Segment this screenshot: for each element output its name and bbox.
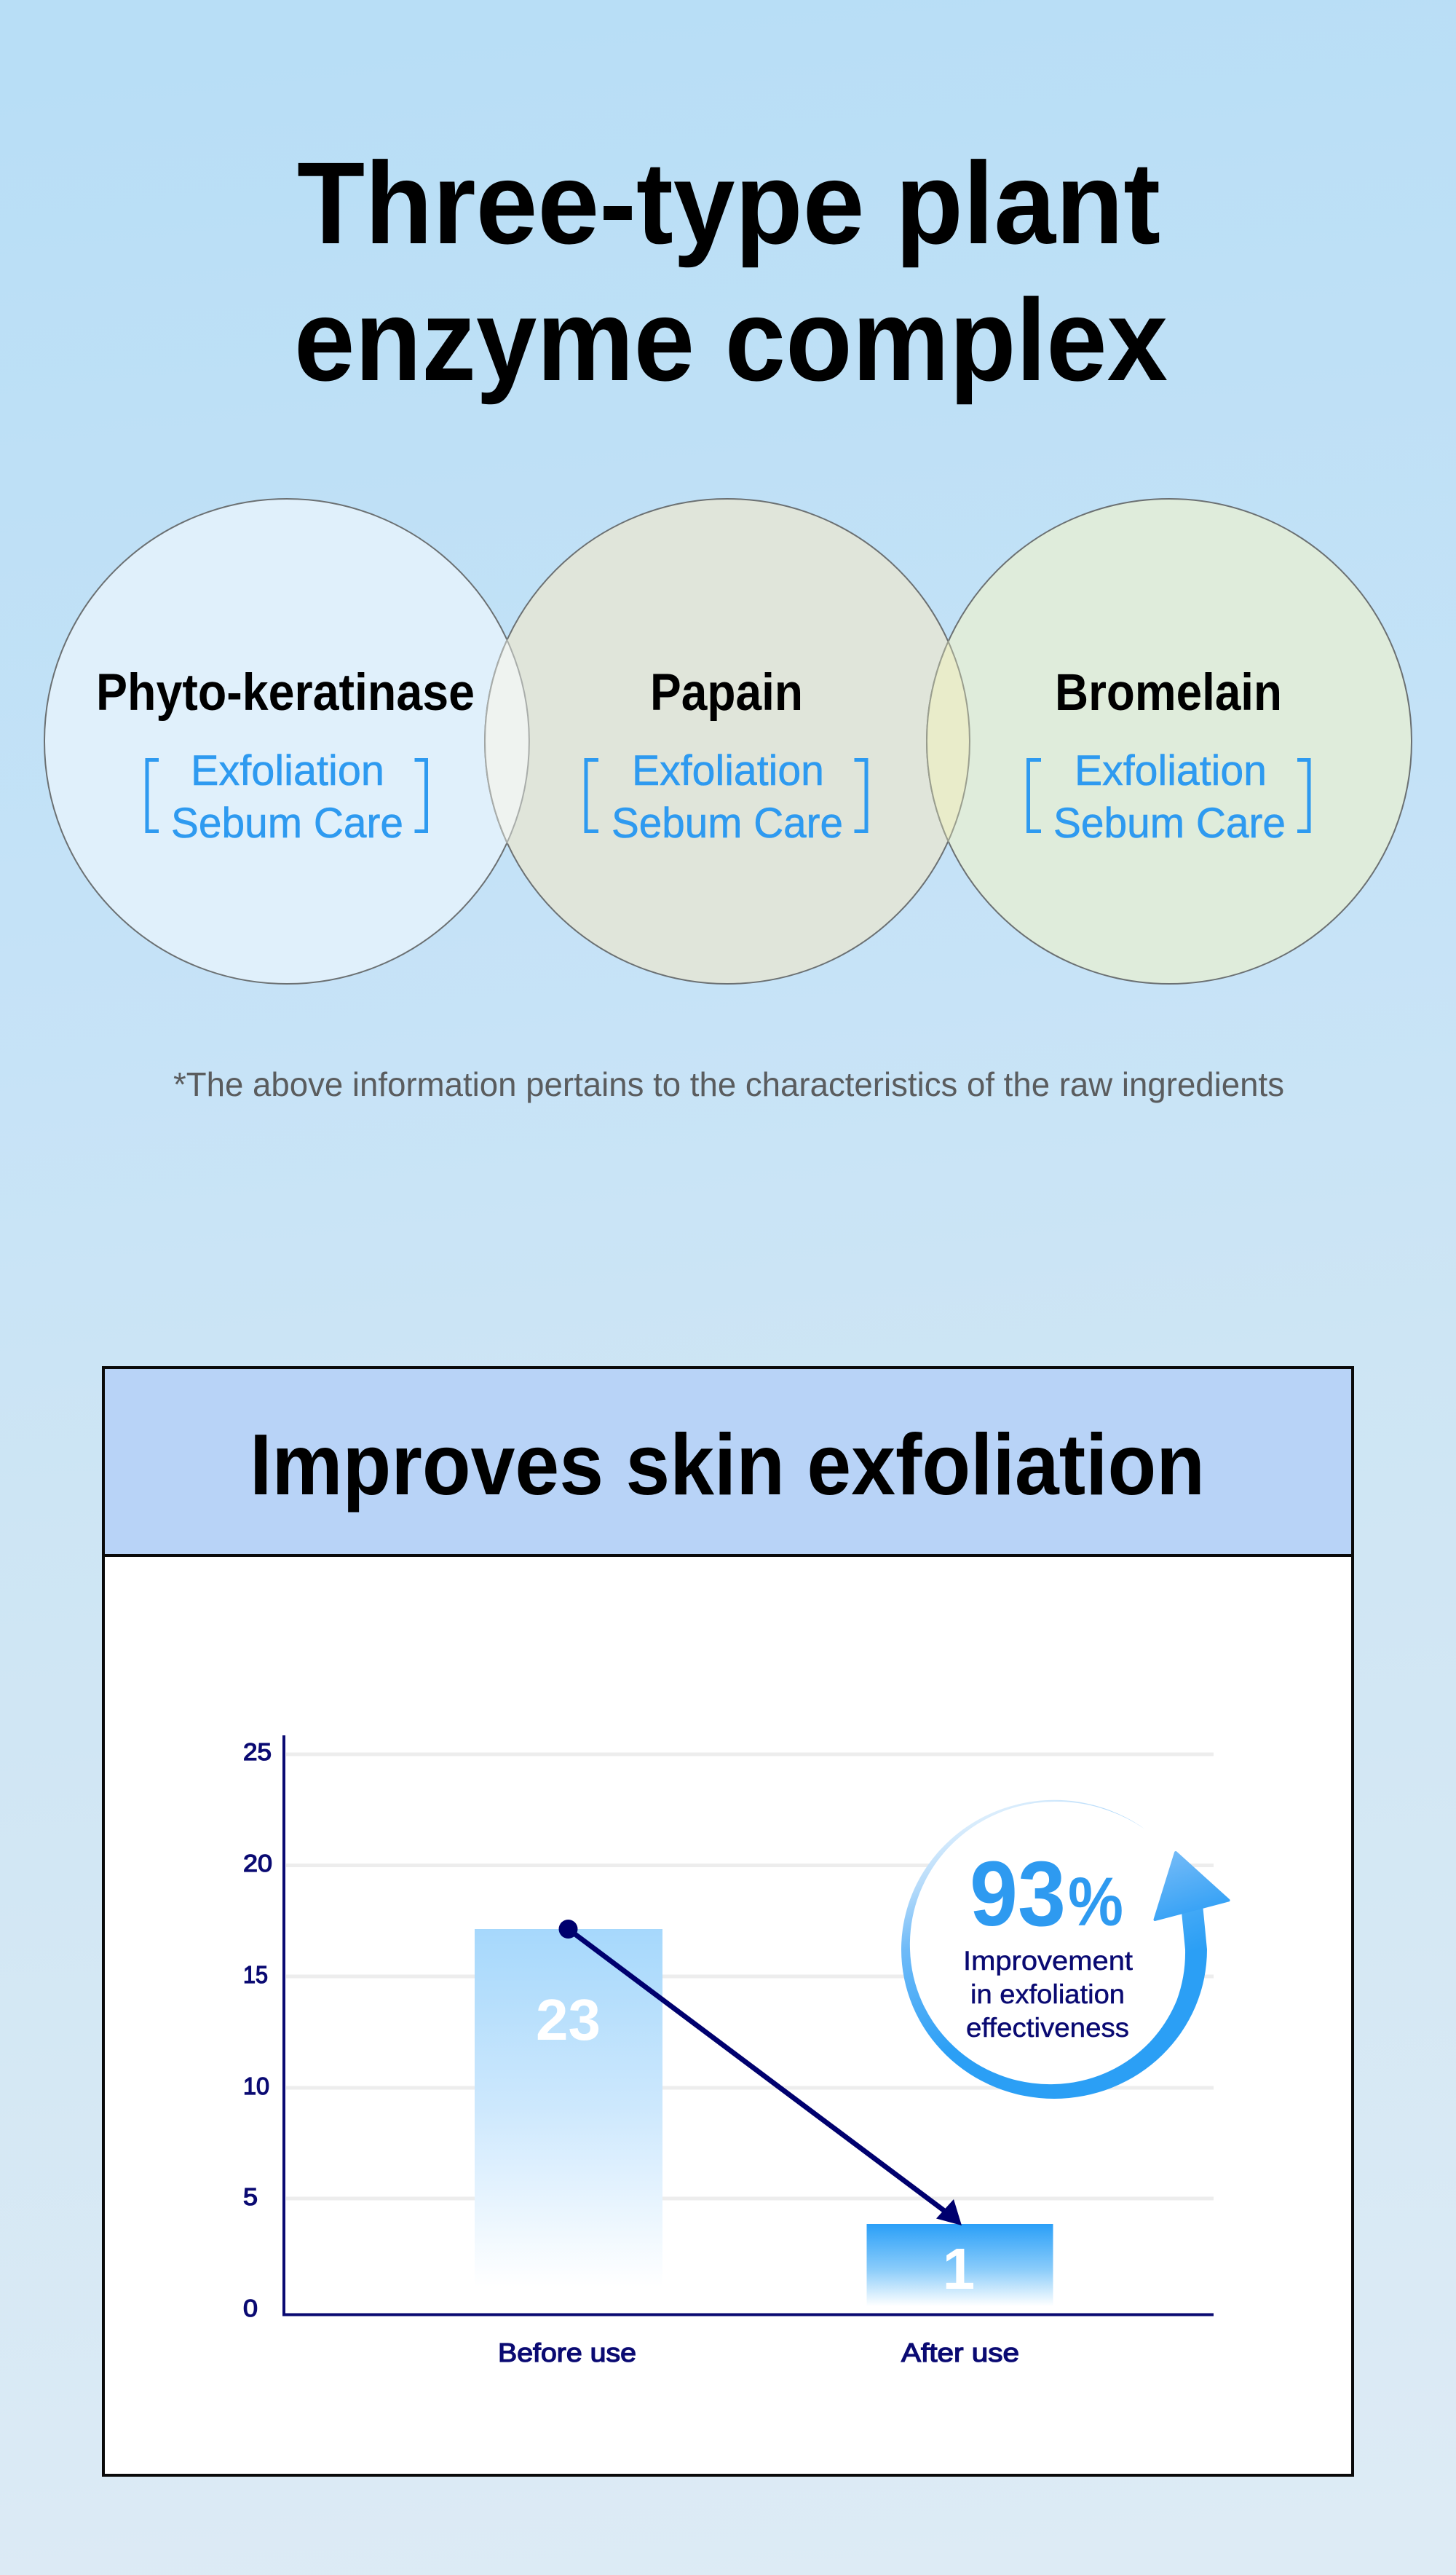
text: bromelain: Bromelain [1055,664,1282,722]
text: phyto-keratinase [96,664,475,847]
stat description [963,1946,1133,2043]
y axis labels: 5 [243,2183,258,2210]
icon: circular arrow [901,1800,1229,2099]
title: Three-type plant [297,138,1160,268]
bar chart [243,1735,1214,2367]
callout: 93% improvement [901,1800,1229,2099]
text: papain: Papain [650,664,803,722]
heading: Improves skin exfoliation [250,1416,1205,1513]
overlap: second and third circles [927,642,970,841]
axes [284,1735,1214,2314]
panel: three enzyme circles [44,499,1412,984]
title [294,138,1168,405]
bar: after use: 1 [943,2236,975,2301]
text: phyto-keratinase: Phyto-keratinase [96,664,475,722]
panel: improves skin exfoliation [103,1368,1353,2475]
y axis labels: 25 [243,1738,272,1765]
bar: before use [475,1929,662,2287]
arrow: decrease from before to after [559,1920,962,2225]
overlap: first and second circles [485,640,529,843]
y axis labels: 10 [243,2073,269,2099]
text: bromelain [1028,664,1309,847]
stat: 93% [970,1842,1123,1945]
x axis labels: Before use [498,2338,636,2367]
panel header [103,1368,1353,1555]
footnote: *The above information pertains to the characteristics of the raw ingredients [173,1065,1284,1103]
circle: papain [485,499,970,984]
y axis labels: 0 [243,2295,258,2322]
stat: 93%: % [1068,1864,1123,1941]
x axis labels: After use [901,2338,1019,2367]
text: bromelain: Exfoliation [1075,747,1267,794]
text: papain [586,664,866,847]
x axis labels [498,2338,1019,2367]
circle: bromelain [927,499,1412,984]
text: papain: Sebum Care [612,800,843,847]
title: enzyme complex [294,275,1168,405]
text: phyto-keratinase: Exfoliation [191,747,384,794]
bar: after use [866,2224,1053,2306]
text: phyto-keratinase: Sebum Care [171,800,403,847]
panel body [103,1368,1353,2475]
stat: 93%: 93 [970,1842,1066,1945]
stat description: in exfoliation [970,1979,1125,2009]
y axis labels: 15 [243,1961,268,1988]
stat description: effectiveness [966,2013,1129,2043]
text: bromelain: Sebum Care [1053,800,1286,847]
y axis labels [243,1738,272,2322]
stat description: Improvement [963,1946,1133,1976]
y axis labels: 20 [243,1850,272,1877]
circle: phyto-keratinase [44,499,529,984]
bar: before use: 23 [536,1987,601,2052]
text: papain: Exfoliation [632,747,824,794]
